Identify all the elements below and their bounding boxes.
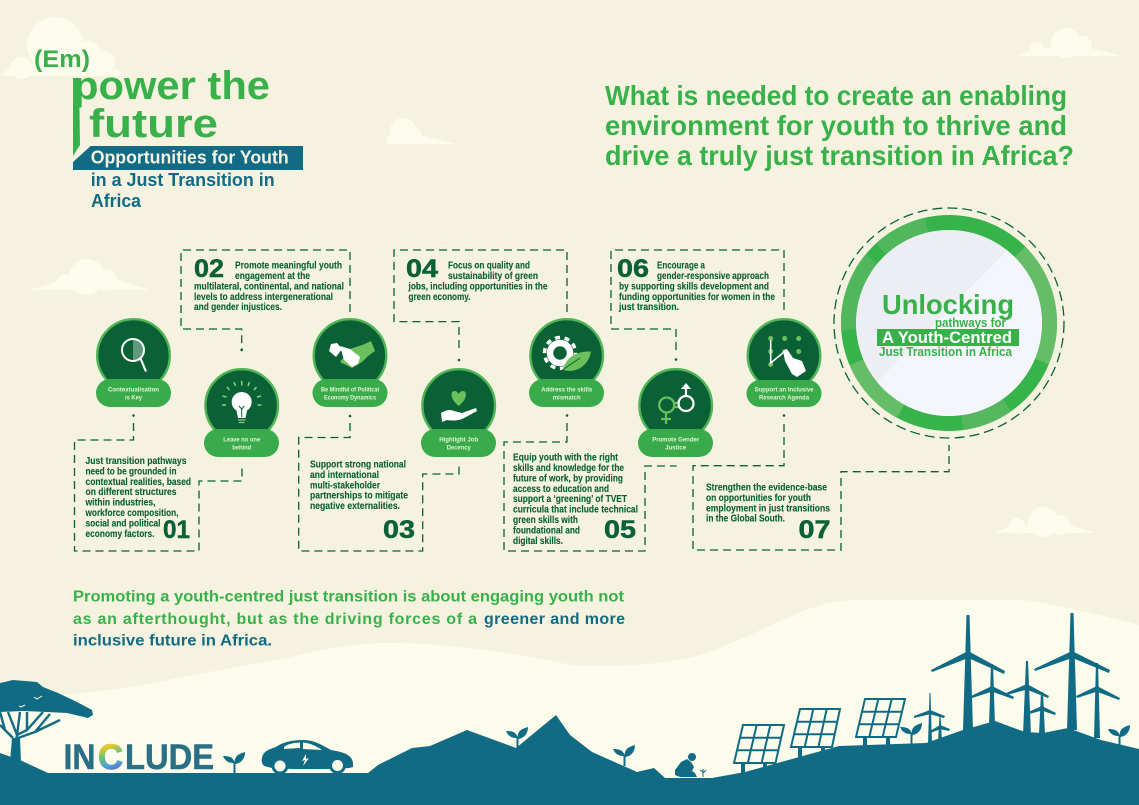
text block 02: levels to address intergenerational: [194, 292, 333, 303]
text block 05: digital skills.: [513, 536, 563, 547]
badge 6: gender justice: Promote Gender: [652, 436, 700, 444]
text block 05: skills and knowledge for the: [513, 463, 624, 474]
closing statement: inclusive future in Africa.: [73, 633, 272, 650]
text block 07: [706, 482, 830, 544]
icon: light bulb: [222, 381, 262, 422]
text block 01: within industries,: [85, 498, 156, 509]
badge 1: contextualisation: [96, 319, 171, 407]
subtitle line 1: Opportunities for Youth: [91, 148, 289, 168]
text block 05: support a ‘greening’ of TVET: [513, 494, 627, 505]
badge 7: research agenda: [746, 319, 822, 407]
connector frame 03: [299, 423, 459, 551]
title: power the: power the: [73, 64, 270, 108]
title: future: future: [89, 102, 218, 146]
acacia tree: [0, 680, 93, 762]
text block 03: partnerships to mitigate: [310, 491, 408, 502]
main question heading: environment for youth to thrive and: [605, 110, 1067, 141]
p stem: [73, 78, 80, 156]
central title: pathways for: [935, 316, 1006, 330]
text block 03: [310, 460, 415, 544]
text block 01: on different structures: [86, 487, 177, 498]
INCLUDE logo: [64, 738, 214, 777]
text block 04: 04: [406, 255, 438, 283]
icon: handshake: [329, 341, 375, 368]
connector frame 02: [181, 250, 350, 350]
text block 03: 03: [383, 516, 415, 544]
text block 06: gender-responsive approach: [657, 271, 769, 282]
closing statement: [73, 588, 625, 650]
text block 05: curricula that include technical: [513, 505, 638, 516]
text block 06: [617, 255, 775, 313]
central title: Unlocking: [882, 289, 1014, 320]
text block 01: workforce composition,: [85, 508, 179, 519]
text block 06: funding opportunities for women in the: [619, 292, 775, 303]
text block 07: in the Global South.: [706, 514, 785, 525]
text block 01: 01: [163, 516, 190, 544]
connector frame 07: [693, 424, 949, 550]
text block 05: [513, 453, 638, 547]
cloud: top left: [0, 17, 126, 79]
text block 06: 06: [617, 255, 649, 283]
badge 5: skills mismatch: Address the skills: [541, 386, 592, 394]
text block 02: multilateral, continental, and national: [194, 281, 344, 292]
icon: touch grid: [768, 336, 806, 377]
INCLUDE logo: LUDE: [125, 738, 214, 777]
text block 05: foundational and: [513, 525, 580, 536]
icon: magnifying glass: [122, 339, 146, 372]
title block: [34, 46, 303, 211]
badge 4: job decency: [421, 369, 496, 457]
title: (Em): (Em): [34, 46, 90, 73]
electric car: [262, 740, 353, 774]
text block 05: access to education and: [513, 484, 609, 495]
closing statement: Promoting a youth-centred just transition is about engaging youth not: [73, 588, 625, 606]
central title: A Youth-Centred: [882, 329, 1012, 347]
closing statement: as an afterthought, but as the driving forces of a: [73, 611, 477, 628]
badge 6: gender justice: [638, 369, 713, 457]
text block 04: Focus on quality and: [448, 260, 530, 272]
icon: heart over hand: [441, 391, 477, 422]
text block 03: and international: [310, 470, 379, 481]
text block 05: Equip youth with the right: [513, 453, 619, 464]
badge 4: job decency: Highlight Job: [439, 436, 478, 444]
text block 02: 02: [194, 255, 224, 283]
text block 05: green skills with: [513, 515, 578, 526]
connector frame 04: [394, 250, 567, 352]
subtitle banner: [73, 146, 303, 170]
badge 2: leave no one behind: behind: [232, 445, 251, 452]
central title: Just Transition in Africa: [879, 345, 1013, 359]
badge 1: contextualisation: is Key: [125, 394, 142, 402]
text block 06: just transition.: [618, 302, 679, 313]
text block 07: employment in just transitions: [706, 503, 830, 514]
text block 02: [194, 255, 344, 313]
badge 3: political economy: [312, 319, 388, 407]
text block 01: need to be grounded in: [86, 466, 177, 477]
connector frame 06: [611, 250, 784, 352]
badge 4: job decency: Decency: [447, 445, 471, 452]
birds: [19, 696, 42, 707]
text block 07: Strengthen the evidence-base: [706, 482, 827, 494]
text block 07: on opportunities for youth: [706, 493, 811, 504]
subtitle line 2: in a Just Transition in: [91, 170, 275, 190]
text block 01: social and political: [86, 518, 161, 529]
badge 7: research agenda: Support an Inclusive: [754, 386, 814, 394]
text block 04: [406, 255, 548, 303]
badge 2: leave no one behind: Leave no one: [223, 436, 260, 444]
badge 5: skills mismatch: mismatch: [553, 394, 581, 402]
icon: gear and leaf: [544, 338, 591, 371]
text block 04: jobs, including opportunities in the: [408, 281, 548, 292]
badge 2: leave no one behind: [204, 369, 279, 457]
farmer planting: [675, 753, 706, 777]
closing statement: greener and more: [484, 611, 625, 628]
badge 6: gender justice: Justice: [665, 445, 686, 452]
badge 3: political economy: Economy Dynamics: [324, 394, 376, 402]
teal ground silhouette: [0, 715, 1139, 805]
main question heading: drive a truly just transition in Africa?: [605, 140, 1074, 171]
connector dots: [132, 349, 785, 417]
cloud: lower right: [995, 507, 1095, 537]
text block 01: contextual realities, based: [86, 477, 191, 488]
icon: gender symbols: [659, 383, 694, 424]
subtitle line 3: Africa: [91, 191, 142, 211]
light hill: [0, 600, 1139, 805]
cloud: left middle: [30, 259, 150, 295]
main question heading: [605, 80, 1074, 171]
badge 7: research agenda: Research Agenda: [759, 395, 809, 402]
text block 01: [85, 456, 191, 544]
central title: [877, 289, 1019, 359]
central circle: Unlocking pathways: [834, 208, 1064, 438]
INCLUDE logo: IN: [64, 738, 96, 777]
text block 02: and gender injustices.: [194, 302, 282, 313]
text block 01: Just transition pathways: [86, 456, 187, 467]
text block 04: green economy.: [408, 292, 471, 303]
seedlings: [223, 723, 1130, 773]
badge 3: political economy: Be Mindful of Political: [321, 386, 379, 394]
main question heading: What is needed to create an enabling: [605, 80, 1067, 111]
connector frame 05: [504, 423, 677, 551]
badge 1: contextualisation: Contextualisation: [108, 386, 159, 394]
text block 06: by supporting skills development and: [619, 281, 769, 292]
INCLUDE logo: C: [98, 738, 123, 777]
text block 06: Encourage a: [657, 260, 705, 272]
text block 03: multi-stakeholder: [310, 480, 380, 491]
cloud: centre: [385, 118, 456, 144]
text block 05: 05: [604, 516, 636, 544]
wind turbines: [914, 613, 1120, 745]
solar panels: [734, 699, 905, 774]
cloud: top right: [1017, 28, 1122, 58]
text block 02: Promote meaningful youth: [235, 260, 342, 272]
text block 03: negative externalities.: [310, 501, 400, 512]
text block 02: engagement at the: [235, 271, 310, 282]
badge 5: skills mismatch: [529, 319, 604, 407]
connector frame 01: [74, 423, 242, 551]
text block 05: future of work, by providing: [513, 473, 623, 484]
text block 07: 07: [798, 516, 830, 544]
text block 03: Support strong national: [310, 460, 406, 470]
text block 01: economy factors.: [86, 529, 155, 540]
text block 04: sustainability of green: [448, 271, 538, 282]
